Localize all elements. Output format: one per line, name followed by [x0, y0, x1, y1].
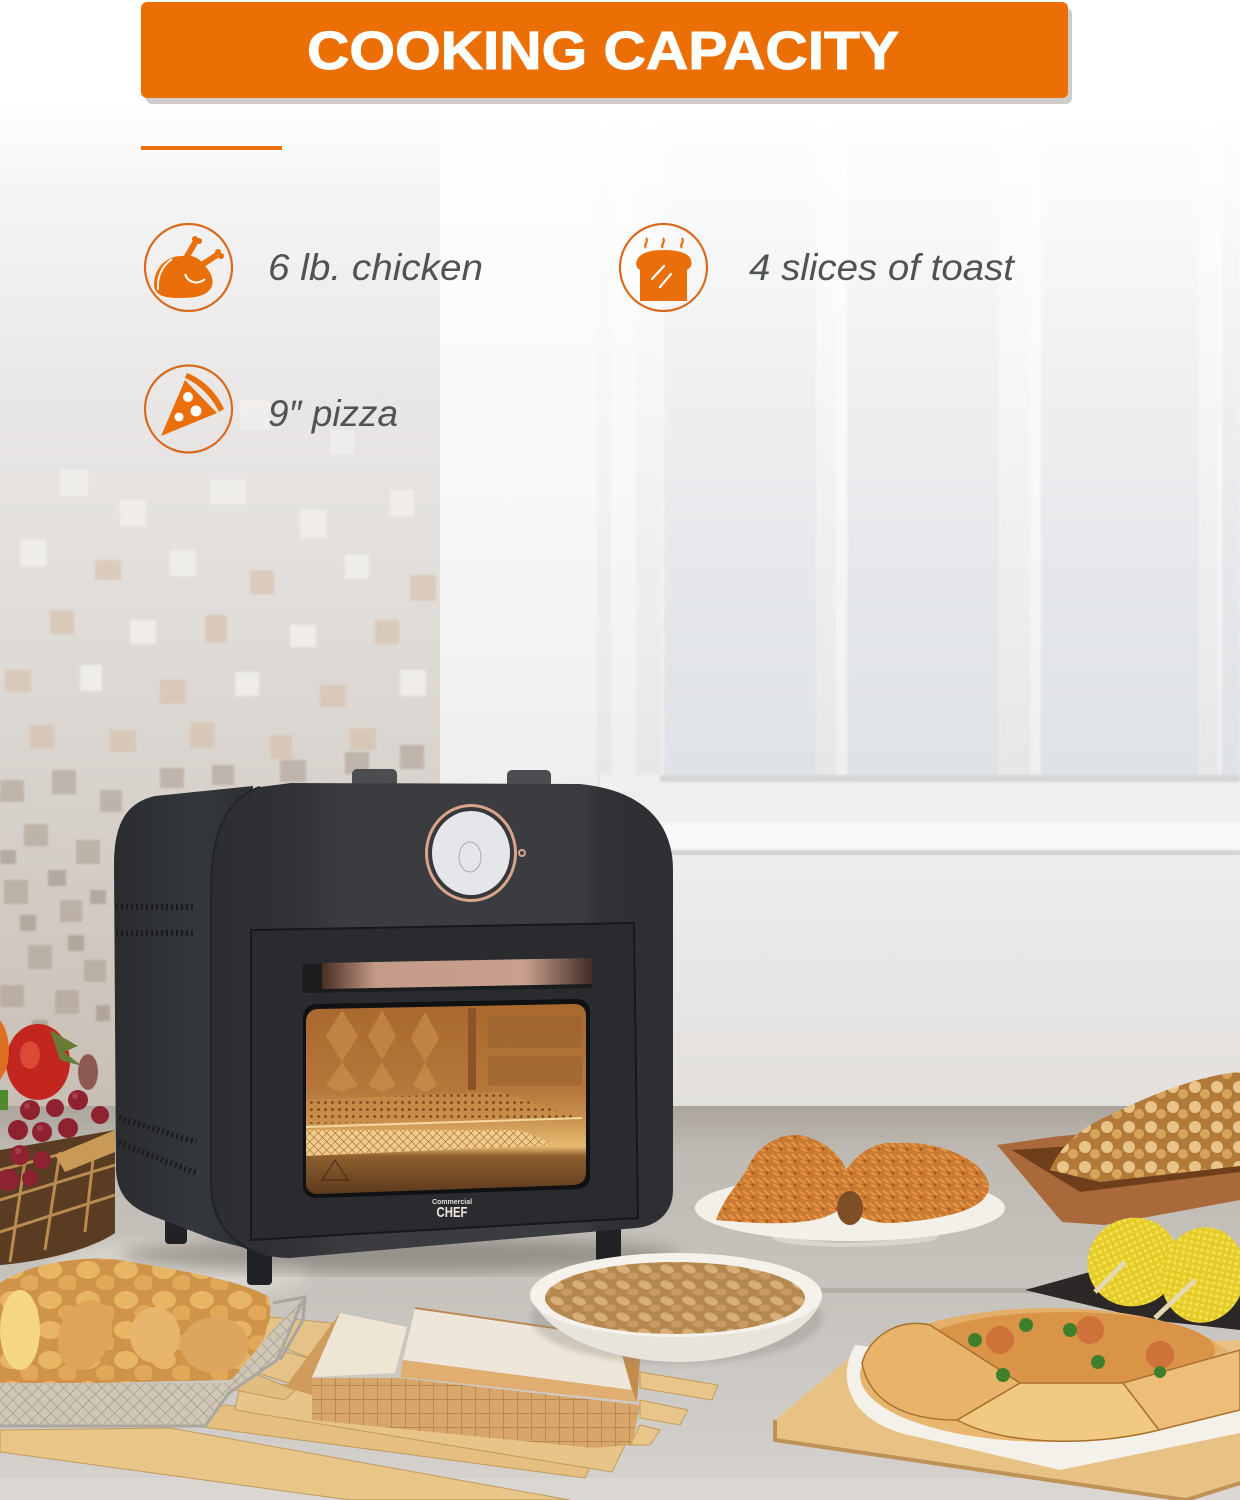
title banner: COOKING CAPACITY — [307, 21, 899, 81]
item: 9 inch pizza: 9″ pizza — [268, 393, 398, 434]
brand logo — [432, 1199, 472, 1221]
brand logo: CHEF — [436, 1204, 468, 1221]
oven shadow — [120, 1237, 680, 1273]
food: grilled corn — [1025, 1203, 1240, 1331]
side body — [114, 786, 260, 1252]
knobs — [352, 769, 551, 793]
accent rule — [141, 146, 282, 150]
brand logo: Commercial — [432, 1199, 472, 1206]
food: tomatoes and grape basket — [0, 1020, 115, 1265]
door handle — [303, 958, 592, 993]
side vents — [116, 907, 196, 1173]
bread stack — [285, 1308, 640, 1448]
window area — [440, 100, 1240, 860]
door — [251, 923, 638, 1240]
icon: pizza slice — [145, 366, 232, 452]
icon: toast — [620, 224, 707, 311]
food: fried chicken plate — [695, 1135, 1005, 1247]
air fry basket — [306, 1092, 582, 1156]
food: pizza on board — [775, 1308, 1240, 1500]
item: 4 slices of toast — [620, 224, 1016, 311]
door window — [303, 999, 590, 1198]
lower wall — [440, 790, 640, 1110]
control dial — [425, 804, 525, 902]
left wall mosaic — [0, 100, 440, 1110]
item: 6 lb. chicken: 6 lb. chicken — [268, 247, 483, 288]
legs — [165, 1210, 621, 1285]
item: 6 lb. chicken — [145, 224, 483, 311]
air fryer oven — [114, 769, 673, 1285]
front body — [211, 783, 673, 1258]
icon: chicken — [145, 224, 232, 311]
food: almonds bowl — [530, 1253, 823, 1364]
counter — [0, 1106, 1240, 1500]
food: fried nuggets in wire basket — [0, 1258, 305, 1426]
food: bread on wooden boards — [0, 1308, 718, 1500]
item: 9 inch pizza — [145, 366, 398, 452]
food: popcorn tray — [997, 1072, 1240, 1225]
back wall studs — [326, 1010, 439, 1092]
title banner — [141, 2, 1072, 104]
item: 4 slices of toast: 4 slices of toast — [749, 247, 1016, 288]
